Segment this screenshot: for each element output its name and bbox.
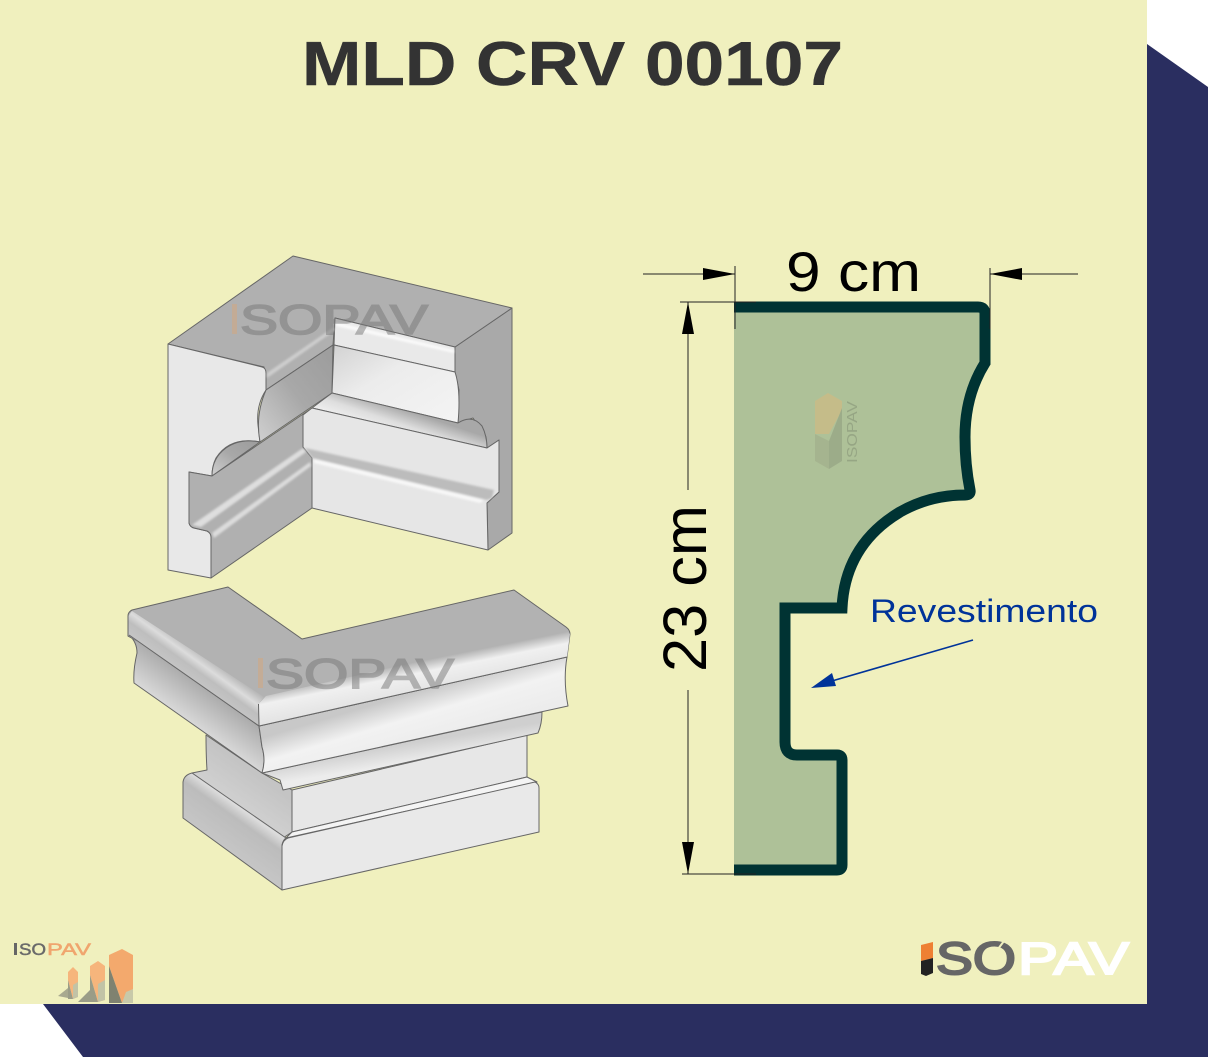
cove, right side	[332, 345, 459, 423]
cove, left side	[258, 345, 333, 442]
3D moulding: upper piece	[168, 256, 512, 578]
base block	[282, 782, 539, 890]
logo: ISOPAV bottom right	[921, 933, 1129, 984]
label: Revestimento with arrow: Revestimento	[870, 593, 1098, 629]
light top strip	[334, 318, 455, 372]
watermark: upper piece: SOPAV	[240, 296, 428, 343]
profile watermark: ISOPAV	[844, 401, 861, 463]
logo: ISOPAV bottom left with towers	[14, 940, 133, 1003]
left strip	[128, 611, 264, 726]
logo: ISOPAV bottom left with towers: SO	[19, 940, 46, 959]
3D moulding: lower piece	[128, 587, 570, 890]
top left cove	[129, 635, 264, 773]
tower 1	[68, 967, 78, 999]
moulding profile section	[734, 307, 985, 870]
top right cove	[259, 657, 568, 773]
label: Revestimento with arrow	[811, 593, 1098, 688]
dimension: height 23 cm: 23 cm	[651, 505, 719, 672]
tower 3	[109, 949, 133, 1003]
inner left lower face	[189, 408, 312, 578]
dimension: height 23 cm	[651, 302, 756, 874]
watermark: lower piece: SOPAV	[266, 650, 454, 697]
top surface	[128, 587, 570, 726]
logo: ISOPAV bottom right: PAV	[1018, 933, 1129, 984]
plinth left	[192, 735, 292, 838]
title: MLD CRV 00107	[302, 30, 843, 99]
lower bead, back	[312, 393, 487, 448]
dimension: width 9 cm	[643, 240, 1078, 329]
lower fillet	[262, 712, 542, 790]
lower bead, left	[212, 441, 260, 476]
base left	[183, 773, 286, 890]
logo: ISOPAV bottom left with towers: PAV	[47, 940, 92, 959]
right end face	[455, 308, 512, 550]
profile watermark	[815, 393, 861, 469]
front strip	[258, 628, 570, 726]
plinth transition	[286, 777, 537, 838]
plinth band	[292, 735, 527, 832]
top face	[168, 256, 512, 390]
logo: ISOPAV bottom right: SO	[936, 933, 1016, 984]
front edges	[129, 635, 567, 726]
groove highlights	[192, 322, 494, 538]
tower 2	[90, 961, 105, 1002]
profile outline	[734, 307, 985, 870]
left end face	[168, 344, 266, 578]
inner right lower face	[303, 408, 499, 550]
dimension: width 9 cm: 9 cm	[786, 240, 921, 303]
